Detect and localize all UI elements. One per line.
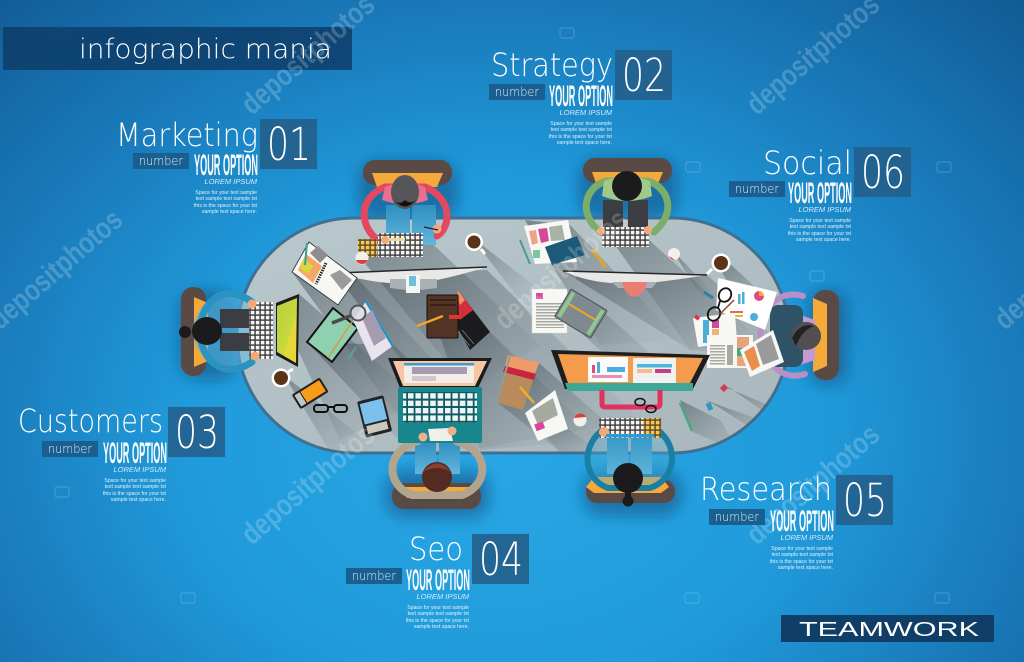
label: Marketing 01: Space for your text sample [195,190,257,196]
keyboard [249,302,273,359]
badge: teamwork [781,615,994,642]
person: Research seat, bottom right [586,418,675,506]
label: Research 05: number [715,509,760,524]
label: Customers 03: Space for your text sample [104,478,166,484]
badge: teamwork: TEAMWORK [799,619,980,641]
label: Research 05: sample text space here. [778,565,833,571]
person: Strategy seat, top right [583,158,672,247]
label: Seo 04: Space for your text sample [407,605,469,611]
label: Social 06 [729,144,911,243]
label: Customers 03: text sample text sample txt [105,484,167,490]
person: Seo seat, bottom left [388,358,492,509]
label: Seo 04: 04 [479,533,523,586]
label: Marketing 01: sample text space here. [202,209,257,215]
monitor back, top left [337,267,487,293]
glasses [635,398,656,412]
label: Research 05: 05 [843,474,887,527]
laptop screen [276,294,299,367]
label: Marketing 01: 01 [267,118,311,171]
watermarks: depositphotos [740,418,886,551]
label: Seo 04: sample text space here. [414,624,469,630]
watermarks: depositphotos [488,203,634,336]
label: Marketing 01: text sample text sample txt [196,196,258,202]
label: Customers 03: Customers [18,402,163,440]
glasses [705,286,734,323]
label: Social 06: 06 [861,146,905,199]
pens, bottom right [680,386,726,431]
label: Research 05 [700,470,893,571]
chart paper [716,278,777,330]
label: Social 06: Space for your text sample [789,218,851,224]
label: Strategy 02: YOUR OPTION [549,80,613,113]
label: Research 05: this is the space for your txt [770,559,834,565]
label: Strategy 02: text sample text sample txt [551,127,613,133]
label: Social 06: number [735,181,780,196]
label: Research 05: LOREM IPSUM [780,533,834,542]
coffee cups [272,233,730,388]
desk balls [356,248,680,426]
label: Customers 03: this is the space for your txt [103,491,167,497]
label: Customers 03: LOREM IPSUM [113,465,167,474]
label: Social 06: LOREM IPSUM [798,205,852,214]
keyboard [599,418,661,438]
phone, glasses and tablet [292,377,392,438]
label: Social 06: text sample text sample txt [790,224,852,230]
label: Customers 03: sample text space here. [111,497,166,503]
label: Social 06: YOUR OPTION [788,177,852,210]
brown wallet and black folder [417,290,490,350]
label: Marketing 01: this is the space for your txt [194,203,258,209]
book and paper, bottom center [497,355,568,441]
label: Social 06: sample text space here. [796,237,851,243]
label: Seo 04: Seo [409,530,463,568]
long shadows [276,220,800,452]
person: Social seat, right [761,290,839,380]
person: Customers seat, left [179,287,299,376]
label: Research 05: Space for your text sample [771,546,833,552]
label: Marketing 01 [116,116,317,215]
label: Seo 04: YOUR OPTION [406,564,470,597]
panel: person shadows [178,158,848,518]
label: Marketing 01: number [139,153,184,168]
document and tablet, center [532,289,607,338]
person: Marketing seat, top left [358,160,452,257]
notebook with spiral [292,242,357,305]
label: Strategy 02: number [495,84,540,99]
label: Seo 04: this is the space for your txt [406,618,470,624]
header band [3,27,352,70]
green notebook and magnifier [307,300,394,362]
header title: infographic mania [79,34,332,65]
label: Seo 04: number [352,568,397,583]
label: Customers 03: number [48,441,93,456]
label: Strategy 02 [489,46,672,146]
label: Customers 03: 03 [175,406,219,459]
label: Strategy 02: LOREM IPSUM [559,108,613,117]
label: Research 05: YOUR OPTION [770,505,834,538]
label: Seo 04: LOREM IPSUM [416,592,470,601]
notebook and teal folder, top center [520,220,606,268]
icon: camera watermarks [55,28,951,603]
label: Social 06: Social [763,144,852,182]
label: Customers 03 [18,402,225,503]
label: Strategy 02: sample text space here. [557,140,612,146]
label: Marketing 01: LOREM IPSUM [204,177,258,186]
keyboard [602,227,649,247]
laptop [388,358,492,443]
monitor front, bottom right [551,350,710,412]
label: Strategy 02: Space for your text sample [550,121,612,127]
panel: meeting table [237,218,800,453]
watermarks: depositphotos [235,418,381,551]
label: Social 06: this is the space for your txt [788,231,852,237]
label: Seo 04: text sample text sample txt [408,611,470,617]
label: Strategy 02: this is the space for your txt [549,134,613,140]
label: Strategy 02: 02 [622,49,666,102]
panel: papers near Social seat [693,278,784,377]
label: Marketing 01: YOUR OPTION [194,149,258,182]
label: Strategy 02: Strategy [491,46,613,84]
label: Research 05: text sample text sample txt [772,552,834,558]
label: Research 05: Research [700,470,832,508]
label: Customers 03: YOUR OPTION [103,437,167,470]
monitor back, top right [563,271,707,297]
label: Seo 04 [346,530,529,630]
label: Marketing 01: Marketing [116,116,258,154]
keyboard [358,233,423,257]
